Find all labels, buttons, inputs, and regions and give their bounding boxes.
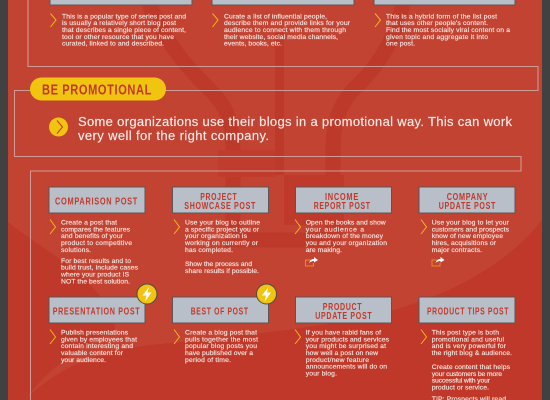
card: project showcase post: share results if possible. [185, 268, 259, 275]
card: best of post: pulls together the most [185, 336, 258, 343]
card: product tips post: product or service. [432, 384, 489, 392]
card: product update post [295, 297, 392, 378]
card: company update post: Use your blog to let your [432, 220, 510, 226]
card: comparison post: For best results and to [61, 258, 131, 265]
card: best of post [172, 284, 276, 364]
card: income report post: breakdown of the money [306, 233, 384, 240]
card text: aggregated post: that uses other people's content. [386, 20, 488, 27]
card text: influencer list post: events, books, etc. [224, 41, 282, 48]
card: comparison post: and benefits of your [61, 233, 124, 240]
card: comparison post: COMPARISON POST [55, 195, 138, 207]
card: best of post: period of time. [185, 357, 231, 364]
card text: aggregated post: Find the most socially viral content on a [386, 27, 510, 34]
card: best of post: Create a blog post that [185, 330, 257, 336]
card text: aggregated post: given topic and aggregate it into [386, 34, 488, 41]
card: product update post: how well a post on new [306, 350, 378, 357]
card: product tips post: PRODUCT TIPS POST [427, 306, 509, 318]
intro statement: Some organizations use their blogs in a promotional way. This can work [78, 114, 512, 129]
card: product update post: your products and services [306, 336, 390, 343]
card: comparison post: compares the features [61, 226, 131, 233]
card: company update post: customers and prospects [432, 226, 510, 233]
card text: curated link post: tool or other resource that you have [62, 34, 174, 41]
card text: curated link post: is usually a relatively short blog post [62, 20, 176, 27]
card: presentation post: contain interesting and [61, 343, 133, 350]
card: product tips post: promotional and useful [432, 336, 504, 343]
card: project showcase post: working on currently or [184, 240, 259, 247]
card: comparison post: Create a post that [61, 220, 117, 226]
card text: aggregated post: one post. [386, 41, 415, 48]
card: comparison post: NOT the best solution. [61, 278, 130, 286]
card: income report post: you and your organization [306, 240, 387, 247]
card: product update post: product/new feature [306, 357, 369, 364]
card: project showcase post: has completed. [185, 247, 233, 254]
card: project showcase post: Show the process and [185, 261, 252, 268]
card: income report post: are making. [306, 247, 342, 254]
card: product update post: PRODUCT [323, 301, 362, 313]
card: company update post [419, 187, 515, 266]
card text: influencer list post: Curate a list of influential people, [224, 13, 327, 20]
card: best of post: BEST OF POST [191, 306, 249, 318]
card: company update post: hires, acquisitions or [432, 240, 497, 247]
card: project showcase post: a specific project you or [185, 226, 260, 233]
card text: curated link post [50, 13, 186, 48]
card text: influencer list post: their website, social media channels, [224, 34, 338, 41]
card: presentation post: given by employees that [61, 336, 137, 343]
card: company update post: major contracts. [432, 247, 482, 254]
card: presentation post: Publish presentations [61, 330, 129, 336]
card: company update post: UPDATE POST [439, 200, 496, 212]
card: product update post: announcements will do on [306, 364, 387, 371]
card: product update post: your blog. [306, 371, 337, 378]
card: comparison post: build trust, include cases [61, 265, 139, 272]
card: comparison post: where your product IS [60, 272, 129, 279]
card: presentation post [49, 284, 157, 364]
icon: lightning badge [137, 284, 157, 304]
card: product update post: you might be surprised at [306, 343, 386, 350]
card text: curated link post: curated, linked to and described. [62, 41, 164, 48]
top card boxes [50, 0, 515, 5]
card: company update post: COMPANY [447, 191, 488, 203]
card: product tips post [419, 297, 515, 400]
card: product tips post: and is very powerful for [432, 343, 507, 350]
card: company update post: know of new employee [432, 233, 503, 240]
card: income report post [295, 187, 392, 266]
card: project showcase post: SHOWCASE POST [184, 200, 256, 212]
card: income report post: INCOME [325, 191, 359, 203]
card: project showcase post [172, 187, 268, 275]
section heading: be promotional: BE PROMOTIONAL [42, 82, 152, 98]
card: best of post: popular blog posts you [185, 343, 257, 350]
card text: aggregated post [375, 13, 510, 48]
card: income report post: Open the books and show [306, 220, 386, 226]
card text: influencer list post: describe them and provide links for your [224, 20, 351, 27]
card: product tips post: Create content that helps [432, 364, 511, 371]
card: income report post: REPORT POST [314, 200, 371, 212]
card: project showcase post: your organization is [185, 233, 248, 240]
card: comparison post: product to competitive [61, 240, 132, 247]
card text: influencer list post: audience to connect with them through [224, 27, 346, 34]
card: presentation post: your audience. [61, 357, 106, 364]
card text: curated link post: This is a popular type of series post and [62, 13, 186, 20]
card: best of post: have published over a [185, 350, 253, 357]
card: presentation post: PRESENTATION POST [53, 306, 140, 318]
card: product tips post: your customers be more [432, 371, 502, 378]
card: income report post: your audience a [306, 226, 364, 233]
card: product tips post: successful with your [432, 378, 491, 385]
intro statement [49, 114, 512, 143]
card text: curated link post: that describes a single piece of content, [62, 27, 186, 34]
card: product tips post: the right blog & audience. [432, 350, 512, 357]
card: project showcase post: PROJECT [200, 191, 237, 203]
card: comparison post [49, 187, 145, 286]
icon: lightning badge [256, 284, 276, 304]
icon: share [432, 257, 444, 266]
intro statement: very well for the right company. [78, 128, 269, 143]
card text: aggregated post: This is a hybrid form of the list post [386, 13, 497, 20]
icon: share [306, 257, 318, 266]
card: presentation post: valuable content for [61, 350, 124, 357]
card: product update post: UPDATE POST [315, 310, 372, 322]
section heading: be promotional [30, 78, 166, 100]
card text: influencer list post [212, 13, 351, 48]
card: comparison post: solutions. [61, 247, 91, 254]
card: product tips post: This post type is both [432, 330, 499, 336]
card: project showcase post: Use your blog to outline [185, 220, 260, 226]
card: product update post: If you have rabid fans of [306, 330, 381, 336]
